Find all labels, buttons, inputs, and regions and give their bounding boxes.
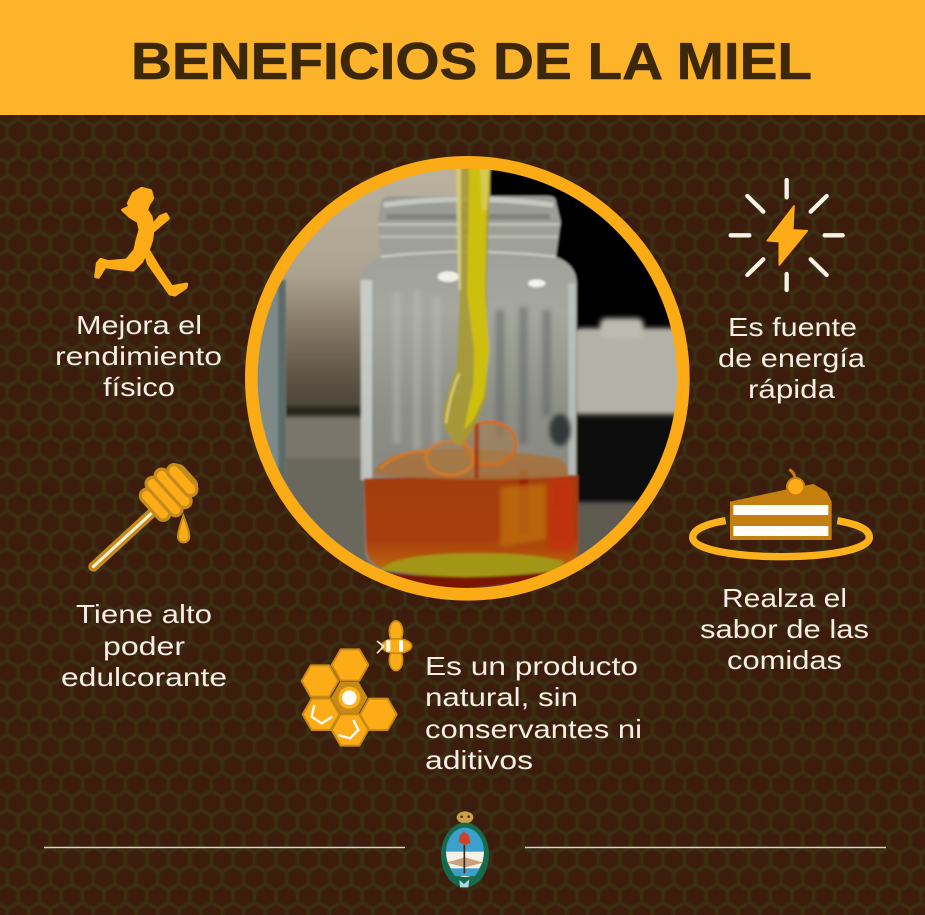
- text: realza el sabor de las comidas: Realza el: [722, 583, 847, 613]
- circular photo: honey pouring into glass jar: [250, 160, 690, 600]
- glass jar: [360, 196, 577, 580]
- honey in jar: [364, 422, 578, 590]
- title: BENEFICIOS DE LA MIEL: [131, 33, 812, 91]
- text: realza el sabor de las comidas: [700, 583, 869, 675]
- benefit: natural product: [302, 621, 642, 775]
- text: tiene alto poder edulcorante: edulcorante: [61, 662, 227, 692]
- text: es un producto natural, sin conservantes ni aditivos: conservantes ni: [425, 714, 642, 744]
- footer: [44, 811, 886, 887]
- title banner: [0, 0, 925, 115]
- text: mejora el rendimiento físico: físico: [103, 372, 175, 402]
- text: es un producto natural, sin conservantes ni aditivos: [425, 651, 642, 775]
- text: mejora el rendimiento físico: rendimiento: [55, 341, 222, 371]
- text: mejora el rendimiento físico: Mejora el: [76, 310, 202, 340]
- icon: cake slice on plate: [693, 469, 869, 557]
- benefit: physical performance: [55, 188, 222, 402]
- text: es un producto natural, sin conservantes ni aditivos: aditivos: [425, 745, 533, 775]
- text: mejora el rendimiento físico: [55, 310, 222, 402]
- icon: honey dipper: [93, 456, 206, 567]
- text: es un producto natural, sin conservantes ni aditivos: natural, sin: [425, 682, 578, 712]
- text: realza el sabor de las comidas: comidas: [727, 645, 842, 675]
- text: es fuente de energía rápida: de energía: [718, 343, 866, 373]
- icon: honeycomb and bee: [302, 621, 412, 746]
- text: es un producto natural, sin conservantes ni aditivos: Es un producto: [425, 651, 638, 681]
- honey stream: [443, 163, 491, 445]
- text: realza el sabor de las comidas: sabor de las: [700, 614, 869, 644]
- icon: runner: [96, 188, 187, 295]
- text: tiene alto poder edulcorante: Tiene alto: [76, 599, 212, 629]
- text: tiene alto poder edulcorante: poder: [103, 631, 185, 661]
- benefit: enhances flavor: [693, 469, 869, 675]
- icon: Argentine coat of arms: [441, 811, 489, 887]
- text: tiene alto poder edulcorante: [61, 599, 227, 692]
- text: es fuente de energía rápida: [718, 312, 866, 404]
- text: es fuente de energía rápida: Es fuente: [728, 312, 857, 342]
- benefit: sweetening power: [61, 456, 227, 692]
- text: es fuente de energía rápida: rápida: [748, 374, 836, 404]
- circle ring: [251, 162, 683, 594]
- icon: lightning bolt with rays: [731, 180, 843, 290]
- photo background: [250, 160, 690, 600]
- benefit: quick energy: [718, 180, 866, 404]
